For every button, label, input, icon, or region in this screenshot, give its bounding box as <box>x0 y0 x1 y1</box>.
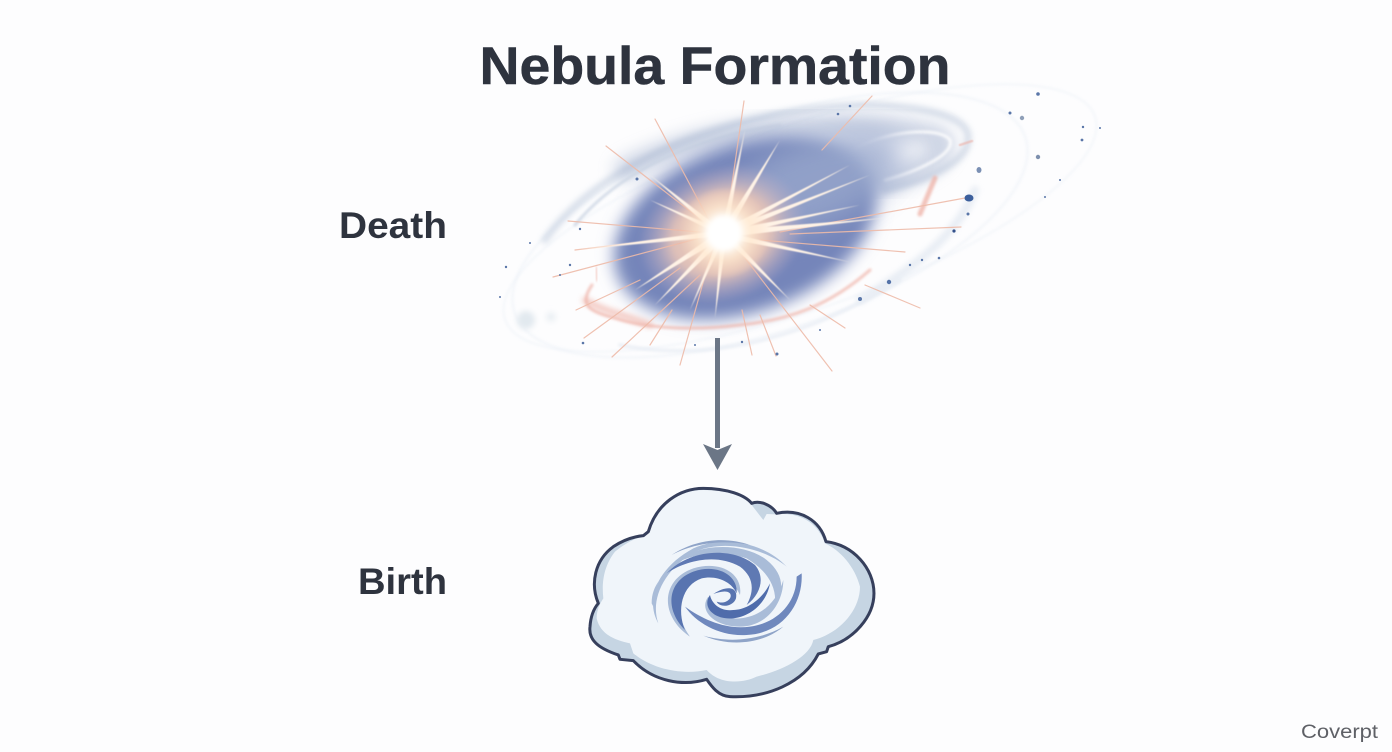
illustration: exploding star nebula <box>475 29 1125 412</box>
central star burst <box>678 187 770 279</box>
peach inner glow <box>620 143 824 325</box>
salmon outer rays <box>553 96 965 371</box>
swirling gas arms <box>545 106 975 351</box>
cloud shadow base <box>590 488 874 697</box>
bright white rays <box>575 130 885 318</box>
cloud light face <box>597 490 860 682</box>
outer faint orbit rings <box>475 29 1125 412</box>
illustration: swirling cloud <box>590 488 874 697</box>
arrow: death to birth <box>703 338 732 470</box>
blue gas body <box>588 103 902 353</box>
title: Nebula Formation <box>480 37 950 96</box>
faint dust blobs <box>517 311 556 329</box>
spiral vortex <box>652 540 802 643</box>
label: Death: Death <box>339 205 447 246</box>
watermark: Coverpt: Coverpt <box>1301 722 1379 743</box>
label: Birth: Birth <box>358 561 447 602</box>
cloud outline <box>590 488 874 697</box>
scattered star specks <box>499 92 1101 355</box>
salmon gas streaks <box>585 141 972 328</box>
